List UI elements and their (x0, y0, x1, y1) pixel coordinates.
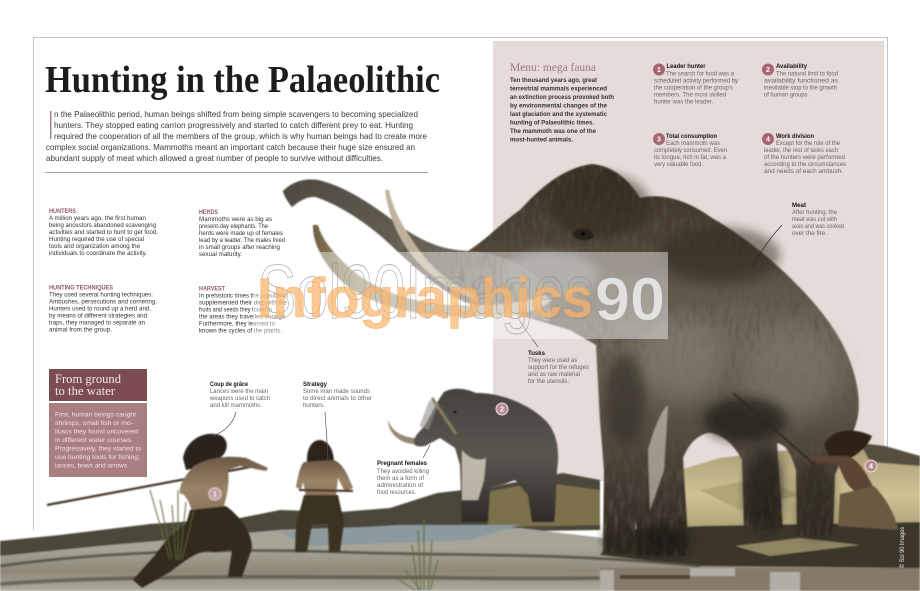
panel: from ground to the water: shrimps, small fish or mo- (55, 421, 133, 427)
menu: mega fauna text: The mammoth was one of the (510, 128, 596, 135)
callout 3: total consumption: very valuable food. (654, 162, 703, 168)
callout: strategy: hunters. (303, 403, 325, 409)
rear tusk (385, 190, 480, 300)
intro text block: abundant supply of meat which allowed a great number of people to survive without difficulties. (46, 153, 383, 163)
callout 4: work division: Except for the role of the (776, 141, 841, 147)
hunter 3 marker 4: 4 (869, 464, 873, 470)
callout: meat: axes and was cooked (792, 224, 844, 230)
front tusk (313, 225, 552, 317)
callout 1: leader hunter: The search for food was a (666, 72, 735, 78)
text block: hunters (49, 209, 158, 257)
callout: tusks (518, 318, 589, 385)
small mammoth marker 2 (496, 403, 508, 415)
callout 2: availability: Availability (776, 64, 808, 70)
text block: hunting techniques: by means of different strategies and (49, 314, 147, 320)
text block: hunters: activities and started to hunt to get food. (49, 230, 158, 236)
callout: coup de grace (209, 382, 270, 436)
panel: from ground to the water: lluscs they found uncovered (55, 430, 138, 436)
intro text block: hunters. They stopped eating carrion progressively and started to catch different prey to eat. Hunting (54, 120, 413, 130)
text block: herds: sexual maturity. (199, 252, 242, 258)
callout: strategy: Strategy (303, 382, 328, 388)
hunter 2 with lance (295, 440, 353, 552)
mammoth body (283, 164, 859, 556)
title: Hunting in the Palaeolithic (45, 59, 440, 101)
text block: harvest (199, 286, 288, 334)
callout 1: leader hunter: hunter was the leader. (654, 100, 713, 106)
panel: menu background (493, 41, 884, 481)
menu: mega fauna text: by environmental changes of the (510, 102, 607, 110)
callout 1: leader hunter: Leader hunter (666, 64, 706, 70)
small mammoth (388, 389, 558, 522)
text block: hunters: Hunting required the use of special (49, 237, 144, 243)
callout: tusks: for the utensils. (528, 379, 569, 385)
menu: mega fauna text: terrestrial mammals experienced (510, 86, 607, 92)
text block: herds (199, 210, 285, 258)
callout: meat: After hunting, the (792, 210, 838, 216)
text block: hunting techniques: traps, they managed to separate an (49, 320, 145, 326)
callout: pregnant females: food resources. (377, 490, 416, 496)
callout: strategy: Some man made sounds (303, 389, 370, 395)
callout 2: availability: inevitable stop to the growth (764, 86, 837, 92)
text block: harvest: Furthermore, they learned to (199, 322, 276, 328)
callout 4: work division: according to the circumstances (764, 162, 846, 168)
callout: meat: over the fire. (792, 231, 827, 237)
callout: tusks: They were used as (528, 358, 577, 364)
text block: hunters: A million years ago, the first human (49, 216, 146, 222)
panel: from ground to the water: Progressively, they started to (55, 446, 142, 452)
callout 3: total consumption: 3 (657, 136, 661, 144)
page frame (34, 38, 888, 530)
text block: hunting techniques: Hunters used to round up a herd and, (49, 306, 151, 312)
callout: tusks: and as raw material (528, 372, 580, 378)
callout 1: leader hunter (653, 64, 738, 106)
callout: strategy: to direct animals to other (303, 396, 372, 402)
text block: herds: lead by a leader. The males lived (199, 238, 285, 244)
callout 2: availability (762, 64, 838, 98)
text block: hunters: HUNTERS (49, 209, 76, 215)
text block: herds: in small groups after reaching (199, 245, 280, 251)
callout: pregnant females: Pregnant females (377, 461, 428, 467)
callout 4: work division: 4 (766, 136, 770, 144)
callout 4: work division: leader, the rest of tasks each (764, 148, 838, 154)
panel: from ground to the water: in different water courses. (55, 438, 133, 444)
callout 2: availability: 2 (766, 67, 770, 74)
big mammoth (283, 164, 859, 556)
text block: harvest: In prehistoric times the population (199, 294, 288, 300)
callout: meat: Meat (792, 203, 806, 209)
callout: pregnant females: administration of (377, 483, 423, 489)
callout 1: leader hunter: scheduled activity performed by (654, 78, 738, 84)
callout: tusks: Tusks (528, 351, 546, 357)
callout: coup de grace: Coup de grâce (210, 382, 249, 388)
grass tufts (150, 490, 438, 590)
text block: herds: present-day elephants. The (199, 224, 269, 230)
hunter 1 throwing a spear (47, 434, 268, 588)
callout 1: leader hunter: the cooperation of the group's (654, 86, 733, 92)
callout 3: total consumption: Each mammoth was (666, 141, 720, 147)
callout: coup de grace: weapons used to catch (209, 396, 270, 402)
callout 4: work division: of the hunters were performed (764, 155, 845, 161)
callout 2: availability: availability functioned as (764, 78, 838, 84)
hunter 3 marker 4 (865, 460, 877, 472)
callout 2: availability: of human groups. (764, 92, 809, 98)
text block: herds: HERDS (199, 210, 218, 216)
watermark: Sol90Images (258, 250, 594, 335)
callout: pregnant females (377, 445, 430, 496)
callout: coup de grace: and kill mammoths. (210, 403, 262, 409)
callout: tusks: support for the refuges (528, 365, 589, 371)
callout: pregnant females: They avoided killing (377, 469, 429, 475)
panel: from ground to the water: lances, bows and arrows. (55, 464, 129, 470)
text block: hunting techniques: HUNTING TECHNIQUES (49, 286, 113, 292)
panel: from ground to the water: From ground (55, 372, 122, 386)
text block: hunting techniques: They used several hunting techniques: (49, 292, 153, 298)
intro text block: required the cooperation of all the members of the group, which is why human beings had to create more (54, 131, 427, 141)
panel: from ground to the water: to the water (55, 384, 116, 398)
menu: mega fauna text (510, 60, 614, 144)
callout 4: work division (762, 133, 846, 175)
callout 3: total consumption: completely consumed. Even (654, 148, 727, 154)
callout 4: work division: and needs of each ambush. (764, 169, 843, 175)
panel: from ground to the water: use hunting tools for fishing: (55, 455, 140, 461)
panel: from ground to the water: First, human beings caught (55, 412, 136, 418)
callout 4: work division: Work division (776, 134, 814, 140)
callout 1: leader hunter: 1 (657, 67, 661, 74)
menu: mega fauna text: last glaciation and the systematic (510, 111, 607, 118)
text block: harvest: fruits and seeds they found in (199, 308, 272, 314)
watermark: Infographics (257, 266, 593, 329)
menu: mega fauna text: an extinction process provoked both (510, 94, 614, 101)
text block: hunters: tools and organization among the (49, 244, 141, 250)
callout 3: total consumption: Total consumption (666, 134, 717, 140)
callout 3: total consumption (653, 133, 727, 168)
intro text block: complex social organizations. Mammoths meant an important catch because their huge size ensured an (46, 142, 415, 152)
callout: meat: meat was cut with (792, 217, 837, 223)
callout 1: leader hunter: members. The most skilled (654, 92, 726, 98)
callout: meat (752, 203, 844, 268)
text block: hunters: being ancestors abandoned scavenging (49, 223, 156, 229)
text block: harvest: the areas they travelled through. (199, 314, 287, 320)
panel: from ground to the water (49, 369, 147, 477)
text block: hunting techniques: Ambushes, persecutions and cornering. (49, 300, 157, 306)
menu: mega fauna text: most-hunted animals. (510, 136, 573, 144)
text block: hunting techniques: animal from the group. (49, 328, 112, 334)
hunter 3 at mammoth leg (733, 393, 898, 530)
text block: harvest: HARVEST (199, 286, 225, 292)
image credit: © Sol 90 Images (899, 527, 906, 568)
callout 2: availability: The natural limit to food (776, 72, 838, 78)
menu: mega fauna text: hunting of Palaeolithic times. (510, 120, 594, 126)
hunter 1 throwing a spear: 1 (213, 492, 217, 498)
text block: hunting techniques (49, 286, 157, 334)
intro text block: n the Palaeolithic period, human beings shifted from being simple scavengers to becoming specialized (54, 109, 418, 119)
text block: herds: herds were made up of females (199, 231, 283, 237)
watermark: 90 (595, 266, 665, 333)
menu: mega fauna text: Menu: mega fauna (510, 60, 597, 74)
menu: mega fauna text: Ten thousand years ago, great (510, 77, 598, 84)
small mammoth marker 2: 2 (500, 406, 504, 414)
callout: strategy (303, 382, 372, 466)
text block: harvest: supplemented their diet with the (199, 300, 288, 306)
intro text block (46, 109, 427, 163)
text block: hunters: individuals to coordinate the activity. (49, 251, 147, 257)
background hills and shore (0, 443, 920, 591)
text block: harvest: known the cycles of the plants. (199, 328, 282, 334)
callout 3: total consumption: its tongue, rich in fat, was a (654, 155, 727, 161)
mammoth hair and shading (550, 173, 650, 237)
text block: herds: Mammoths were as big as (199, 217, 272, 223)
callout: pregnant females: them as a form of (377, 476, 424, 482)
callout: coup de grace: Lances were the main (210, 389, 268, 395)
